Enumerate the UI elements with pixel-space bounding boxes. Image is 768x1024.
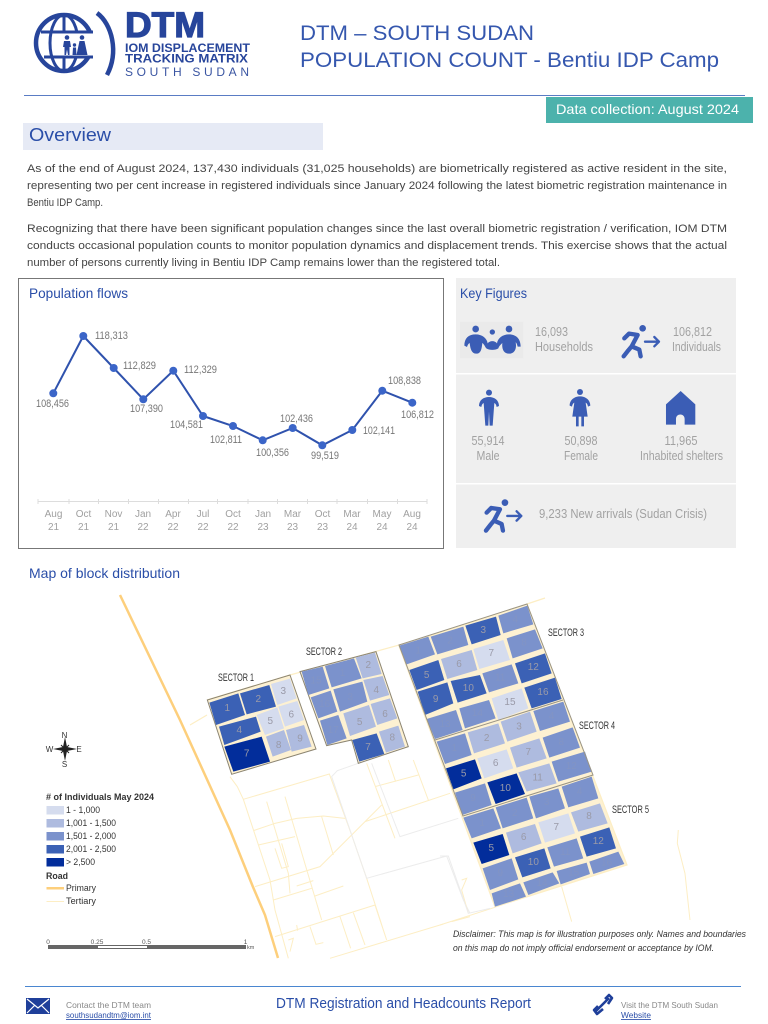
line chart: population over time: 23: [287, 522, 298, 533]
sector 3 and upper sector 4 blocks: 3: [481, 625, 487, 636]
lower sector 4 and sector 5 blocks: 10: [500, 783, 511, 794]
lower sector 4 and sector 5 blocks: 13: [503, 889, 515, 900]
map legend: Primary: [66, 883, 96, 893]
sector 3 and upper sector 4 blocks: 4: [513, 614, 519, 625]
sector 3 and upper sector 4 blocks: 8: [559, 737, 565, 748]
sector boundaries: [399, 604, 593, 816]
icon: new arrivals runner: [486, 499, 521, 531]
lower sector 4 and sector 5 blocks: 9: [470, 793, 476, 804]
map legend: 2,001 - 2,500: [66, 844, 116, 854]
key figure: female: 50,898: [564, 433, 598, 448]
icon: north arrow compass: W: [46, 745, 54, 754]
key figure: male: [472, 433, 504, 463]
sector 1 and sector 2 blocks: 7: [365, 742, 371, 753]
map legend: # of Individuals May 2024: [46, 792, 154, 802]
key figure: male: Male: [476, 448, 500, 463]
line chart: population over time: 21: [108, 522, 119, 533]
sector 3 and upper sector 4 blocks: 6: [456, 659, 462, 670]
text block: overview paragraphs: conducts occasional population counts to monitor population dynamics and displacement trends. This exercise shows that the actual: [27, 240, 727, 252]
sector labels: SECTOR 3: [548, 627, 584, 639]
sector 3 and upper sector 4 blocks: 14: [472, 708, 483, 719]
sector 1 and sector 2 blocks: 3: [348, 692, 354, 703]
sector 1 and sector 2 blocks: 5: [268, 716, 274, 727]
text block: overview paragraphs: number of persons currently living in Bentiu IDP Camp remains lower than the registered total.: [27, 257, 500, 269]
icon: north arrow compass: N: [62, 731, 68, 740]
map scale bar: 0.5: [142, 939, 151, 946]
map disclaimer: [453, 929, 746, 953]
map legend: [46, 792, 154, 906]
line chart: population over time: 106,812: [401, 409, 434, 421]
icon: mail envelope: [26, 998, 50, 1014]
line chart: population over time: Jan: [255, 509, 271, 520]
line chart: population over time: Oct: [225, 509, 241, 520]
panel: key figures: [456, 278, 736, 548]
key figure: individuals: Individuals: [672, 339, 721, 354]
lower sector 4 and sector 5 blocks: 3: [544, 797, 550, 808]
lower sector 4 and sector 5 blocks: 12: [593, 836, 604, 847]
sector 1 and sector 2 blocks: 6: [382, 709, 388, 720]
sector 1 and sector 2 blocks: 4: [237, 725, 243, 736]
icon: person moving with arrow: [624, 325, 659, 356]
sectors 3 to 5 base: [399, 604, 627, 907]
line chart: population over time: 21: [78, 522, 89, 533]
sector 3 and upper sector 4 blocks: 11: [495, 672, 506, 683]
line chart: population over time: 21: [48, 522, 59, 533]
logo: IOM DTM South Sudan: TRACKING MATRIX: [125, 54, 248, 66]
lower sector 4 and sector 5 blocks: 11: [560, 847, 571, 858]
sector 3 and upper sector 4 blocks: 9: [433, 694, 439, 705]
line chart: population over time: Aug: [45, 509, 62, 520]
text block: overview paragraphs: Bentiu IDP Camp.: [27, 197, 103, 209]
map scale bar: km: [247, 945, 255, 951]
sector 1 and sector 2 blocks: 5: [357, 717, 363, 728]
line chart: population over time: Jan: [135, 509, 151, 520]
sector labels: [218, 627, 649, 816]
line chart: population over time: 24: [406, 522, 418, 533]
sector 1 and sector 2 blocks: 17: [328, 725, 339, 736]
sector 1 and sector 2 blocks: 9: [297, 733, 303, 744]
sector 3 and upper sector 4 blocks: 7: [489, 648, 495, 659]
logo: IOM DTM South Sudan: SOUTH SUDAN: [125, 65, 249, 79]
line chart: population over time: Apr: [165, 509, 181, 520]
lower sector 4 and sector 5 blocks: 2: [512, 808, 518, 819]
sector 3 and upper sector 4 blocks: 1: [452, 743, 458, 754]
sector 1 and sector 2 blocks: 1: [225, 703, 231, 714]
data collection banner: [546, 97, 753, 123]
sector 1 and sector 2 blocks: 1: [340, 668, 346, 679]
sector 3 and upper sector 4 blocks: 5: [461, 768, 467, 779]
line chart: population over time: 23: [317, 522, 328, 533]
map legend: > 2,500: [66, 857, 95, 867]
logo: IOM DTM South Sudan: [36, 6, 250, 79]
title: [300, 22, 719, 72]
logo: IOM DTM South Sudan: IOM DISPLACEMENT: [125, 43, 250, 55]
lower sector 4 and sector 5 blocks: 4: [577, 786, 583, 797]
footer: website link: Visit the DTM South Sudan: [621, 1000, 718, 1010]
data collection banner: Data collection: August 2024: [556, 101, 739, 117]
map: block distribution: [46, 595, 746, 958]
map scale bar: [46, 939, 255, 951]
map legend: Tertiary: [66, 896, 96, 906]
sector 3 and upper sector 4 blocks: 2: [447, 635, 453, 646]
sector 1 and sector 2 blocks: [207, 652, 408, 774]
line chart: population over time: Aug: [403, 509, 421, 520]
sector 1 and sector 2 blocks: 16: [319, 699, 331, 710]
sector 1 and sector 2 blocks: 15: [310, 675, 322, 686]
footer: contact: southsudandtm@iom.int: [66, 1010, 152, 1020]
key figure: inhabited shelters: [640, 433, 723, 463]
map scale bar: 0: [46, 939, 50, 946]
lower sector 4 and sector 5 blocks: 8: [586, 811, 592, 822]
text block: overview paragraphs: [27, 163, 727, 269]
lower sector 4 and sector 5 blocks: 6: [521, 832, 527, 843]
sector labels: SECTOR 1: [218, 672, 254, 684]
footer: report title: DTM Registration and Headcounts Report: [276, 995, 532, 1012]
line chart: population over time: [36, 330, 434, 533]
line chart: population over time: 108,838: [388, 375, 421, 387]
sector 3 and upper sector 4 blocks: 12: [528, 662, 539, 673]
logo: IOM DTM South Sudan: DTM: [125, 6, 205, 45]
icon: female: [570, 389, 590, 426]
sector 3 and upper sector 4 blocks: 1: [415, 645, 421, 656]
footer: contact: [26, 998, 152, 1020]
footer: website link: Website: [621, 1010, 651, 1020]
lower sector 4 and sector 5 blocks: 9: [498, 868, 504, 879]
key figure: households: 16,093: [535, 324, 568, 339]
footer: website link: [594, 995, 718, 1020]
lower sector 4 and sector 5 blocks: 12: [566, 761, 577, 772]
map disclaimer: on this map do not imply official endorsement or acceptance by IOM.: [453, 943, 714, 953]
lower sector 4 and sector 5 blocks: 7: [554, 822, 560, 833]
sector 1 and sector 2 blocks: 2: [366, 660, 372, 671]
line chart: population over time: 100,356: [256, 447, 289, 459]
map legend: 1,501 - 2,000: [66, 831, 116, 841]
sector 3 and upper sector 4 blocks: 5: [424, 670, 430, 681]
key figure: new arrivals: 9,233 New arrivals (Sudan Crisis): [539, 506, 707, 521]
lower sector 4 and sector 5 blocks: 5: [489, 843, 495, 854]
line chart: population over time: 107,390: [130, 403, 163, 415]
line chart: population over time: 104,581: [170, 419, 203, 431]
line chart: population over time: Oct: [315, 509, 330, 520]
line chart: population over time: 22: [167, 522, 179, 533]
map legend: 1 - 1,000: [66, 805, 100, 815]
key figure: individuals: 106,812: [673, 324, 712, 339]
sector 1 and sector 2 blocks: 8: [276, 740, 282, 751]
text block: overview paragraphs: As of the end of August 2024, 137,430 individuals (31,025 households) are biometrically registered as active resident in the site,: [27, 163, 727, 175]
key figure: female: [564, 433, 598, 463]
line chart: population over time: 99,519: [311, 450, 339, 462]
sector 1 and sector 2 blocks: 7: [244, 748, 250, 759]
sector 3 and upper sector 4 blocks: [399, 606, 580, 789]
sector 3 and upper sector 4 blocks: 13: [439, 719, 451, 730]
map legend: Road: [46, 871, 68, 881]
sector 3 and upper sector 4 blocks: 6: [493, 758, 499, 769]
sector 3 and upper sector 4 blocks: 8: [521, 637, 527, 648]
line chart: population over time: Mar: [343, 509, 361, 520]
lower sector 4 and sector 5 blocks: [455, 752, 624, 907]
line chart: population over time: 112,329: [184, 364, 217, 376]
lower sector 4 and sector 5 blocks: 11: [532, 772, 543, 783]
sector 3 and upper sector 4 blocks: 3: [516, 721, 522, 732]
icon: north arrow compass: [46, 731, 82, 769]
key figure: inhabited shelters: 11,965: [664, 433, 698, 448]
key figure: individuals: [672, 324, 721, 354]
sector 3 and upper sector 4 blocks: 4: [549, 711, 555, 722]
map disclaimer: Disclaimer: This map is for illustration purposes only. Names and boundaries: [453, 929, 746, 939]
title: DTM – SOUTH SUDAN: [300, 22, 534, 45]
line chart: population over time: 22: [227, 522, 239, 533]
line chart: population over time: 102,141: [363, 425, 395, 437]
sector 1 and sector 2 blocks: 3: [281, 686, 287, 697]
sector 1 and sector 2 blocks: 4: [374, 685, 380, 696]
key figure: households: Households: [535, 339, 593, 354]
sector labels: SECTOR 5: [612, 804, 649, 816]
icon: north arrow compass: E: [76, 745, 82, 754]
key figure: male: 55,914: [472, 433, 504, 448]
heading: key figures: Key Figures: [460, 285, 527, 301]
icon: shelter house: [666, 391, 695, 425]
line chart: population over time: Mar: [284, 509, 302, 520]
map scale bar: 1: [244, 939, 248, 946]
line chart: population over time: 22: [197, 522, 209, 533]
key figure: households: [535, 324, 593, 354]
lower sector 4 and sector 5 blocks: 15: [568, 867, 580, 878]
text block: overview paragraphs: Recognizing that there have been significant population changes since the last overall biometric registration / verification, IOM DTM: [27, 223, 727, 235]
line chart: population over time: 24: [346, 522, 358, 533]
sector 3 and upper sector 4 blocks: 2: [484, 733, 490, 744]
line chart: population over time: 24: [376, 522, 388, 533]
line chart: population over time: 23: [257, 522, 269, 533]
sector 1 and sector 2 blocks: 8: [390, 732, 396, 743]
key figure: inhabited shelters: Inhabited shelters: [640, 448, 723, 463]
sector 3 and upper sector 4 blocks: 7: [526, 747, 532, 758]
icon: family: [460, 322, 523, 358]
map scale bar: 0.25: [91, 939, 104, 946]
map roads: [120, 595, 690, 958]
sector 3 and upper sector 4 blocks: 16: [537, 687, 549, 698]
line chart: population over time: Jul: [197, 509, 209, 520]
line chart: population over time: Oct: [76, 509, 91, 520]
footer: contact: Contact the DTM team: [66, 1000, 151, 1010]
sector labels: SECTOR 2: [306, 646, 342, 658]
heading: map of block distribution: Map of block distribution: [29, 565, 180, 581]
key figure: female: Female: [564, 448, 598, 463]
panel: population flows: [18, 278, 444, 548]
line chart: population over time: 112,829: [123, 360, 156, 372]
heading: Overview: Overview: [29, 125, 112, 145]
sector 1 and sector 2 blocks: 6: [289, 709, 295, 720]
sector 1 and sector 2 blocks: 2: [256, 694, 262, 705]
map legend: 1,001 - 1,500: [66, 818, 116, 828]
icon: north arrow compass: S: [62, 760, 67, 769]
sector labels: SECTOR 4: [579, 720, 615, 732]
line chart: population over time: 102,436: [280, 413, 313, 425]
sector 3 and upper sector 4 blocks: 10: [463, 683, 474, 694]
line chart: population over time: 108,456: [36, 398, 69, 410]
line chart: population over time: 22: [137, 522, 149, 533]
heading: Overview: [23, 123, 323, 150]
line chart: population over time: May: [373, 509, 391, 520]
lower sector 4 and sector 5 blocks: 14: [536, 878, 548, 889]
line chart: population over time: 102,811: [210, 434, 242, 446]
lower sector 4 and sector 5 blocks: 16: [601, 857, 613, 868]
icon: chain link: [594, 995, 612, 1014]
lower sector 4 and sector 5 blocks: 10: [528, 857, 539, 868]
text block: overview paragraphs: representing two per cent increase in registered individuals since January 2024 following the latest biometric registration maintenance in: [27, 180, 727, 192]
line chart: population over time: Nov: [105, 509, 122, 520]
lower sector 4 and sector 5 blocks: 1: [479, 818, 485, 829]
icon: male: [479, 390, 499, 426]
line chart: population over time: 118,313: [95, 330, 128, 342]
sector 3 and upper sector 4 blocks: 15: [504, 697, 516, 708]
heading: population flows: Population flows: [29, 285, 128, 301]
title: POPULATION COUNT - Bentiu IDP Camp: [300, 49, 719, 72]
